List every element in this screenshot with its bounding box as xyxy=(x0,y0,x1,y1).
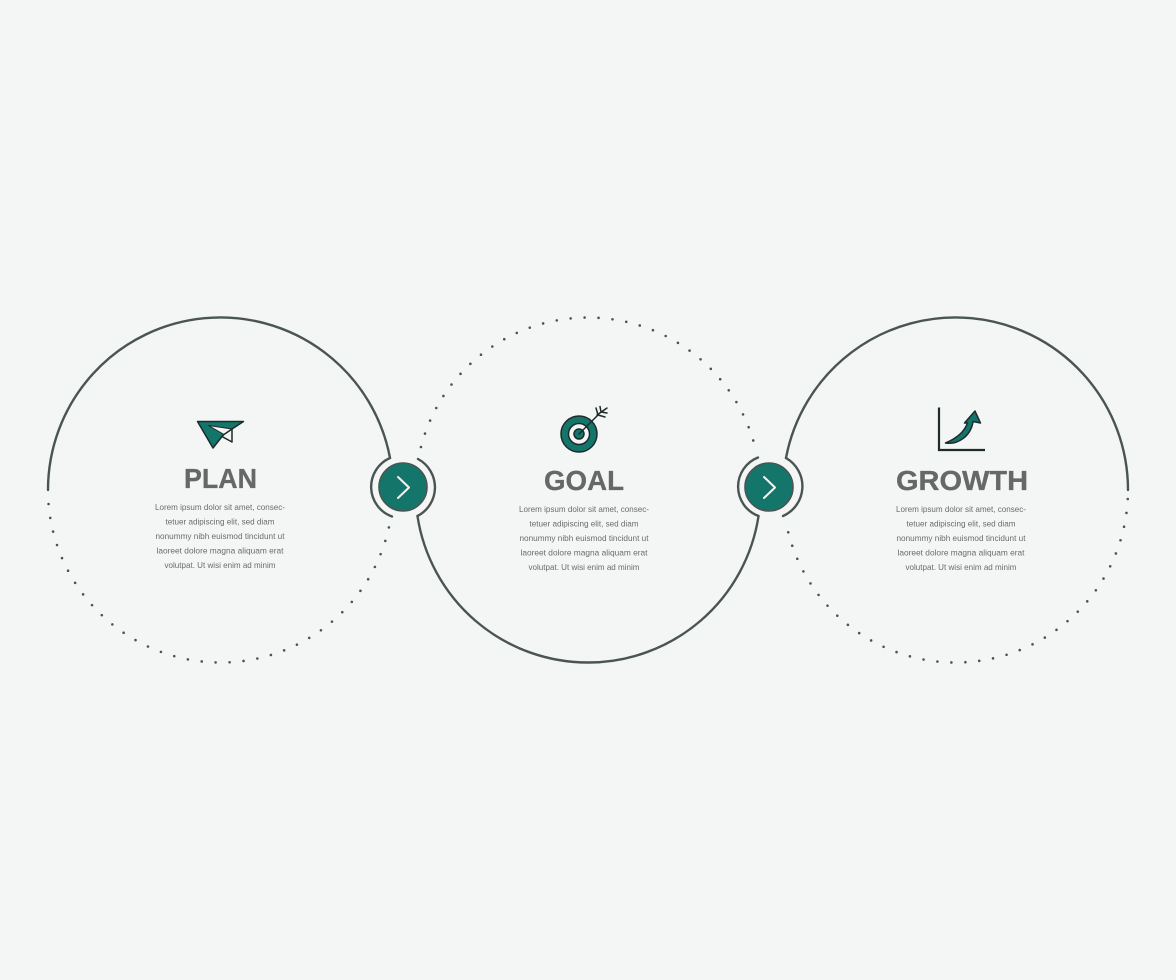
text block: plan description: nonummy nibh euismod tincidunt ut xyxy=(156,531,285,541)
text block: growth description xyxy=(896,504,1026,572)
arrow: first chevron xyxy=(398,477,409,498)
heading: plan: PLAN xyxy=(184,463,257,494)
connector: second arrow button xyxy=(738,458,802,516)
text block: goal description: tetuer adipiscing elit, sed diam xyxy=(530,518,638,528)
panel: growth ring xyxy=(786,317,1128,662)
text block: goal description: laoreet dolore magna aliquam erat xyxy=(520,548,648,558)
icon: growth chart xyxy=(939,408,985,450)
text block: goal description: Lorem ipsum dolor sit amet, consec- xyxy=(519,504,649,514)
icon: paper plane xyxy=(198,422,244,448)
text block: growth description: volutpat. Ut wisi enim ad minim xyxy=(906,562,1016,572)
text block: plan description: volutpat. Ut wisi enim ad minim xyxy=(164,560,276,570)
heading: growth: GROWTH xyxy=(896,465,1028,496)
text block: plan description: Lorem ipsum dolor sit amet, consec- xyxy=(155,502,285,512)
heading: goal: GOAL xyxy=(544,465,624,496)
text block: growth description: Lorem ipsum dolor sit amet, consec- xyxy=(896,504,1026,514)
text block: growth description: tetuer adipiscing elit, sed diam xyxy=(906,518,1016,528)
text block: goal description: nonummy nibh euismod tincidunt ut xyxy=(520,533,649,543)
text block: plan description xyxy=(155,502,285,570)
icon: target with arrow xyxy=(561,406,607,452)
panel: goal ring xyxy=(417,318,759,663)
arrow: second chevron xyxy=(764,477,775,498)
text block: growth description: laoreet dolore magna aliquam erat xyxy=(898,548,1025,558)
text block: goal description: volutpat. Ut wisi enim ad minim xyxy=(528,562,640,572)
panel: plan ring xyxy=(48,317,390,662)
text block: goal description xyxy=(519,504,649,572)
text block: plan description: tetuer adipiscing elit, sed diam xyxy=(166,516,274,526)
connector: first arrow button xyxy=(371,458,435,516)
icon: growth arrow xyxy=(946,411,980,443)
text block: growth description: nonummy nibh euismod tincidunt ut xyxy=(896,533,1026,543)
text block: plan description: laoreet dolore magna aliquam erat xyxy=(156,546,284,556)
